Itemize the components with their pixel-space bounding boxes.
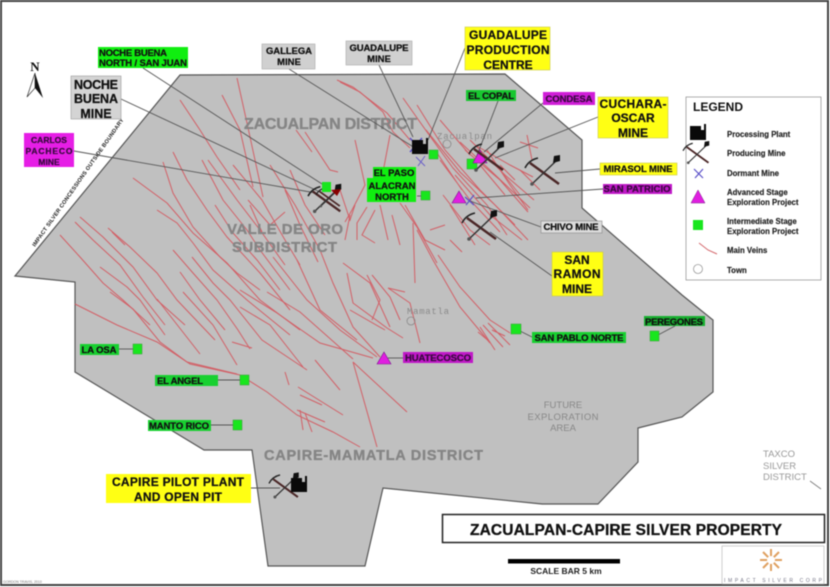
label: Noche Buena North / San Juan: [98, 47, 188, 69]
legend: intermediate stage project: [693, 217, 799, 236]
label: Carlos Pacheco Mine: CARLOS: [31, 135, 67, 145]
label: Cuchara-Oscar Mine: CUCHARA-: [600, 97, 666, 111]
legend: advanced stage project: [691, 188, 799, 207]
label: Capire Pilot Plant: [106, 474, 251, 504]
label: Gallega Mine: MINE: [277, 57, 301, 68]
marker: Mirasol mine: [525, 155, 560, 186]
marker: Guadalupe plant and dormant mine: [410, 138, 428, 166]
label: Noche Buena North / San Juan: NOCHE BUENA: [99, 48, 167, 59]
label: Noche Buena Mine: [71, 76, 121, 121]
label: San Patricio: SAN PATRICIO: [604, 184, 670, 195]
logo: Impact Silver Corp: IMPACT SILVER CORP: [724, 578, 823, 584]
town: Mamatla: Mamatla: [407, 307, 450, 317]
label: Noche Buena Mine: BUENA: [74, 92, 118, 106]
taxco silver district note: [763, 449, 821, 489]
legend panel: [683, 97, 821, 280]
label: El Paso Alacran North: [367, 167, 416, 203]
label: Mirasol Mine: MIRASOL MINE: [604, 164, 672, 175]
legend: processing plant: [690, 124, 791, 140]
label: Chivo Mine: CHIVO MINE: [544, 222, 598, 233]
boundary label: IMPACT SILVER CONCESSIONS OUTSIDE BOUNDARY: [32, 118, 126, 248]
town: Mamatla: [407, 307, 450, 325]
legend: dormant mine: Dormant Mine: [727, 169, 780, 178]
property map polygon: [15, 74, 713, 566]
label: El Angel: EL ANGEL: [157, 376, 203, 387]
legend: town: Town: [727, 266, 747, 275]
label: Guadalupe Mine: GUADALUPE: [350, 43, 408, 54]
marker: Capire mine and plant: [269, 472, 307, 499]
north arrow: N: [30, 59, 40, 74]
legend title: LEGEND: [693, 100, 743, 114]
label: Capire Pilot Plant: CAPIRE PILOT PLANT: [112, 475, 245, 489]
label: Noche Buena Mine: MINE: [80, 107, 112, 121]
label: San Ramon Mine: RAMON: [554, 267, 600, 281]
label: Gallega Mine: [262, 44, 315, 69]
marker: San Ramon mine: [462, 210, 497, 241]
scale bar: [508, 559, 620, 576]
label: San Pablo Norte: SAN PABLO NORTE: [534, 333, 624, 344]
legend: advanced stage project: Advanced Stage: [727, 188, 788, 197]
label: El Paso Alacran North: ALACRAN: [368, 181, 416, 192]
district name: Valle de Oro: [227, 221, 343, 256]
label: Cuchara-Oscar Mine: [598, 97, 668, 140]
town: Zacualpan: Zacualpan: [437, 132, 492, 142]
label: San Ramon Mine: SAN: [564, 253, 590, 267]
taxco silver district note: TAXCO: [763, 449, 795, 460]
label: Condesa: CONDESA: [546, 94, 593, 105]
label: El Paso Alacran North: EL PASO: [374, 168, 414, 179]
future exploration area text: FUTURE: [544, 400, 582, 411]
label: El Copal: EL COPAL: [468, 91, 514, 102]
label: Guadalupe Production Centre: [465, 27, 550, 72]
label: La Osa: LA OSA: [82, 345, 117, 356]
district name: Capire-Mamatla: CAPIRE-MAMATLA DISTRICT: [264, 448, 483, 464]
legend: producing mine: [683, 141, 786, 164]
label: Carlos Pacheco Mine: MINE: [38, 157, 60, 167]
taxco silver district note: SILVER: [763, 461, 796, 472]
legend: producing mine: Producing Mine: [727, 149, 786, 158]
label: Guadalupe Mine: MINE: [367, 54, 391, 65]
north arrow: [27, 59, 43, 98]
label: Carlos Pacheco Mine: [24, 133, 74, 167]
drawing credit: GORDON TRAVIS, 2010: [3, 580, 42, 584]
main veins: [60, 78, 540, 447]
leader lines: [74, 48, 675, 488]
marker: Noche Buena mines: [308, 182, 341, 213]
label: Manto Rico: MANTO RICO: [149, 421, 209, 432]
label: Gallega Mine: GALLEGA: [266, 46, 312, 57]
marker: Cuchara-Oscar mine: [469, 141, 504, 172]
future exploration area text: AREA: [550, 423, 577, 434]
label: Carlos Pacheco Mine: PACHECO: [26, 146, 73, 156]
logo: Impact Silver Corp: [722, 546, 824, 584]
district name: Valle de Oro: VALLE DE ORO: [227, 221, 343, 238]
label: Capire Pilot Plant: AND OPEN PIT: [134, 490, 223, 504]
label: El Paso Alacran North: NORTH: [375, 192, 409, 203]
label: Guadalupe Production Centre: PRODUCTION: [466, 43, 550, 57]
town: Zacualpan: [437, 132, 492, 148]
label: Cuchara-Oscar Mine: OSCAR: [611, 111, 655, 125]
marker: dormant mine San Patricio: [465, 195, 474, 205]
district name: Zacualpan: ZACUALPAN DISTRICT: [244, 116, 417, 133]
label: El Angel: [155, 375, 218, 387]
legend: main veins: [699, 243, 768, 255]
label: Noche Buena North / San Juan: NORTH / SAN JUAN: [99, 58, 187, 69]
label: Guadalupe Production Centre: CENTRE: [483, 58, 533, 72]
future exploration area text: EXPLORATION: [528, 412, 599, 423]
label: Guadalupe Mine: [346, 41, 412, 65]
legend: intermediate stage project: Intermediate Stage: [727, 217, 797, 226]
future exploration area text: [528, 400, 599, 434]
title box: ZACUALPAN-CAPIRE SILVER PROPERTY: [470, 522, 783, 539]
legend: town: [694, 264, 747, 275]
taxco silver district note: DISTRICT: [763, 472, 807, 483]
legend: main veins: Main Veins: [727, 246, 768, 255]
label: Peregones: PEREGONES: [645, 317, 703, 328]
district name: Valle de Oro: SUBDISTRICT: [232, 239, 337, 256]
label: San Ramon Mine: MINE: [562, 282, 592, 296]
label: San Ramon Mine: [552, 252, 603, 296]
legend: dormant mine: [694, 169, 780, 178]
legend: intermediate stage project: Exploration Project: [727, 227, 799, 236]
title box: [442, 514, 824, 542]
markers: intermediate stage projects: [133, 150, 659, 430]
label: Noche Buena Mine: NOCHE: [74, 78, 118, 92]
label: Guadalupe Production Centre: GUADALUPE: [469, 28, 547, 42]
markers: advanced stage projects: [377, 150, 487, 364]
label: Huatecosco: HUATECOSCO: [405, 353, 471, 364]
legend: processing plant: Processing Plant: [727, 130, 791, 139]
legend: advanced stage project: Exploration Project: [727, 198, 799, 207]
scale bar: SCALE BAR 5 km: [530, 566, 602, 576]
label: Cuchara-Oscar Mine: MINE: [618, 126, 648, 140]
